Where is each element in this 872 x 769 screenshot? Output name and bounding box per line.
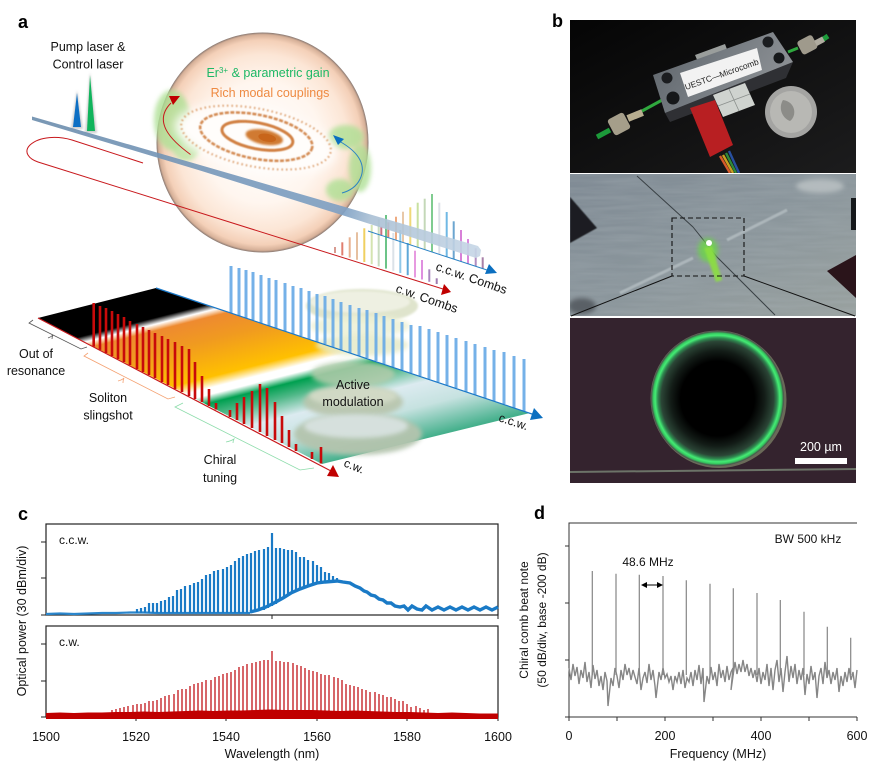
chiral tuning bracket [175,403,314,470]
microsphere resonator [154,32,371,252]
microscope overview photo [568,174,857,316]
wavelength axis title: Wavelength (nm) [225,747,319,761]
pump and control laser label: Pump laser & [50,40,126,54]
bandwidth label: BW 500 kHz [775,532,841,546]
cw label: c.w. [59,635,80,649]
soliton slingshot label: Soliton [89,391,127,405]
noise trace [569,656,857,706]
ccw comb lines [137,533,337,613]
output combs [335,194,483,284]
out of resonance bracket [29,320,87,349]
blue circulation arrow [333,135,362,193]
wavelength tick labels: 1600 [484,730,512,744]
chiral tuning label: Chiral [204,453,236,467]
cw axis label: c.w. [342,456,366,477]
cw noise floor [46,710,498,719]
scale bar [795,440,847,464]
chiral tuning label: tuning [203,471,237,485]
optical power axis title: Optical power (30 dBm/div) [15,546,29,696]
scale bar: 200 µm [800,440,842,454]
spacing label: 48.6 MHz [622,555,674,569]
packaged device photo [570,20,856,173]
platform blue edge and arrow [156,288,543,420]
blue output line [368,231,497,274]
panel label c: c [18,504,28,524]
cw red comb lines [94,303,321,464]
ccw label: c.c.w. [59,533,89,547]
frequency tick labels: 600 [847,729,867,743]
modal coupling text: Rich modal couplings [211,86,329,100]
out of resonance label: resonance [7,364,65,378]
gain and coupling text: 3+ [219,66,228,75]
beat note peaks [592,571,851,675]
blue laser pulse [71,90,83,129]
soliton slingshot label: slingshot [83,408,133,422]
panel a: chiral microcomb schematic [7,12,543,485]
panel c: optical spectra [15,504,512,761]
ccw broad hump [250,581,498,612]
resonator ring microscope photo [570,318,856,483]
beat note axis title: Chiral comb beat note [517,561,531,679]
red circulation arrow [163,96,190,154]
gain and coupling text: & parametric gain [228,66,330,80]
panel label b: b [552,11,563,31]
red output line and loop [27,137,451,295]
platform red edge and arrow [38,318,339,477]
frequency axis title: Frequency (MHz) [670,747,766,761]
cw spectrum chart [41,626,498,721]
ccw noise floor [46,612,250,614]
frequency tick labels [566,729,867,743]
gain and coupling text: Er [206,66,219,80]
active modulation label: modulation [322,395,384,409]
wavelength tick labels [32,730,512,744]
active modulation disks [294,289,422,455]
tapered fiber [32,116,481,258]
wavelength tick labels: 1540 [212,730,240,744]
soliton slingshot bracket [84,353,175,399]
pump and control laser label: Control laser [53,58,123,72]
wavelength tick labels: 1500 [32,730,60,744]
frequency tick labels: 400 [751,729,771,743]
panel b: device photographs [552,11,857,483]
ccw axis label: c.c.w. [497,411,530,433]
beat note chart [565,523,857,721]
active modulation label: Active [336,378,370,392]
out of resonance label: Out of [19,347,54,361]
beat note axis subtitle: (50 dB/div, base -200 dB) [535,552,549,688]
frequency tick labels: 200 [655,729,675,743]
tuning map platform [38,288,530,464]
wavelength tick labels: 1520 [122,730,150,744]
galaxy spiral in sphere [169,94,342,186]
ccw blue comb lines [231,266,524,411]
wavelength tick labels: 1560 [303,730,331,744]
ccw spectrum chart [41,524,498,619]
wavelength tick labels: 1580 [393,730,421,744]
green laser pulse [85,72,97,133]
cw comb lines [112,651,428,714]
cw combs label: c.w. Combs [394,282,460,316]
dashed zoom box [672,218,744,276]
zoom projection lines [571,276,855,316]
frequency tick labels: 0 [566,729,573,743]
ccw combs label: c.c.w. Combs [434,260,509,297]
device label text: UESTC—Microcomb [683,56,760,92]
panel d: beat note spectrum [517,503,867,761]
spacing arrow [641,582,663,588]
panel label a: a [18,12,29,32]
panel label d: d [534,503,545,523]
